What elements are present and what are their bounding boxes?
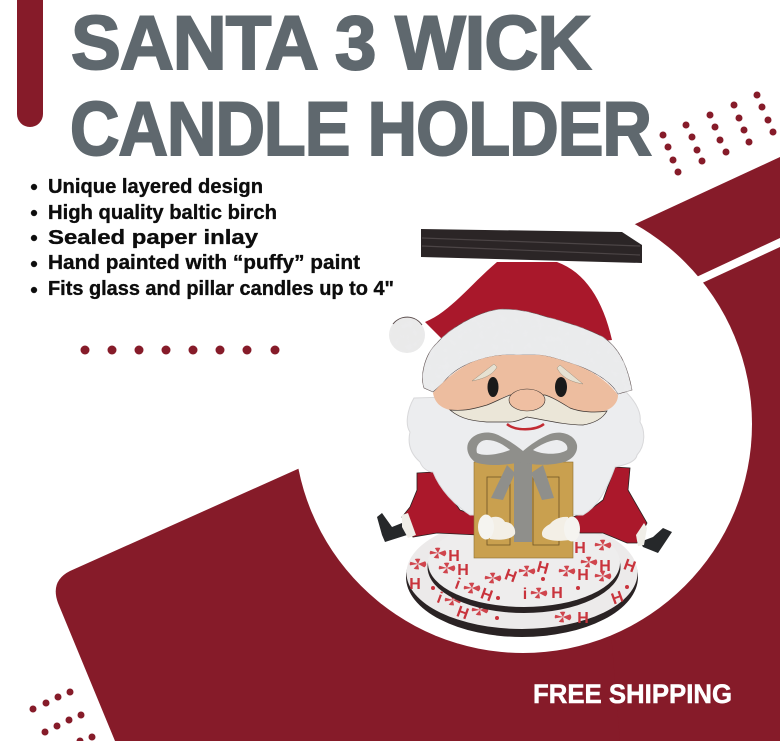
- lower disc pattern: [409, 556, 638, 627]
- eyebrows: [472, 364, 583, 384]
- smile: [507, 424, 544, 429]
- title: SANTA 3 WICK: [71, 0, 591, 85]
- feature list: Fits glass and pillar candles up to 4": [48, 278, 394, 300]
- upper disc pattern: H: [478, 585, 495, 605]
- face: [433, 355, 618, 412]
- feature list: [31, 176, 394, 300]
- upper disc pattern: H: [448, 548, 460, 565]
- upper base disc: [428, 519, 620, 613]
- top right dot pattern: [660, 92, 776, 176]
- white circle behind product: [294, 195, 752, 653]
- feature list: Unique layered design: [48, 176, 263, 198]
- free shipping label: FREE SHIPPING: [533, 679, 732, 709]
- feature list: High quality baltic birch: [48, 202, 277, 224]
- right mitten: [542, 516, 580, 542]
- upper disc pattern: H: [599, 558, 611, 575]
- left arm and leg: [402, 472, 480, 537]
- left trouser cuff: [402, 513, 416, 538]
- upper disc pattern: H: [551, 585, 563, 602]
- bow loop holes: [477, 440, 567, 455]
- dotted divider: [80, 346, 280, 354]
- beard and body: [407, 392, 644, 515]
- upper disc pattern: i: [452, 576, 462, 593]
- left mitten: [478, 514, 515, 540]
- hat pompom: [389, 317, 425, 353]
- candle plate: [421, 229, 642, 263]
- lower disc pattern: H: [454, 603, 471, 623]
- upper disc pattern: H: [502, 566, 519, 586]
- right trouser cuff: [636, 523, 647, 546]
- eyes: [488, 377, 567, 397]
- plate grain: [422, 238, 640, 255]
- upper disc pattern: H: [577, 567, 589, 584]
- upper disc pattern: i: [523, 586, 527, 603]
- red accent bar: [17, 0, 43, 127]
- lower disc pattern: H: [577, 610, 589, 627]
- lower disc pattern: H: [609, 588, 626, 608]
- upper right red band: [633, 157, 780, 280]
- lower disc pattern: H: [409, 576, 421, 593]
- nose: [509, 389, 545, 411]
- title: [70, 0, 651, 172]
- moustache: [450, 395, 607, 425]
- left boot: [377, 513, 407, 542]
- upper disc pattern: [434, 540, 611, 605]
- lower disc pattern: H: [621, 556, 638, 576]
- title: CANDLE HOLDER: [70, 88, 651, 172]
- feature list: Sealed paper inlay: [48, 227, 259, 249]
- lower disc pattern: i: [434, 590, 444, 607]
- bottom left dot pattern: [30, 688, 96, 741]
- feature list: Hand painted with “puffy” paint: [48, 252, 360, 274]
- upper disc pattern: H: [457, 562, 469, 579]
- bottom left red panel: [56, 468, 620, 741]
- santa hat: [425, 262, 612, 345]
- gift box: [474, 462, 573, 558]
- ribbon: [467, 433, 577, 542]
- right boot: [640, 528, 672, 553]
- upper disc pattern: H: [574, 540, 586, 557]
- product: santa candle holder: [377, 229, 672, 637]
- lower right red panel: [500, 247, 780, 741]
- lower base disc: [406, 517, 638, 637]
- hat cuff: [423, 309, 632, 394]
- right arm and leg: [573, 467, 647, 543]
- upper disc pattern: H: [535, 559, 550, 578]
